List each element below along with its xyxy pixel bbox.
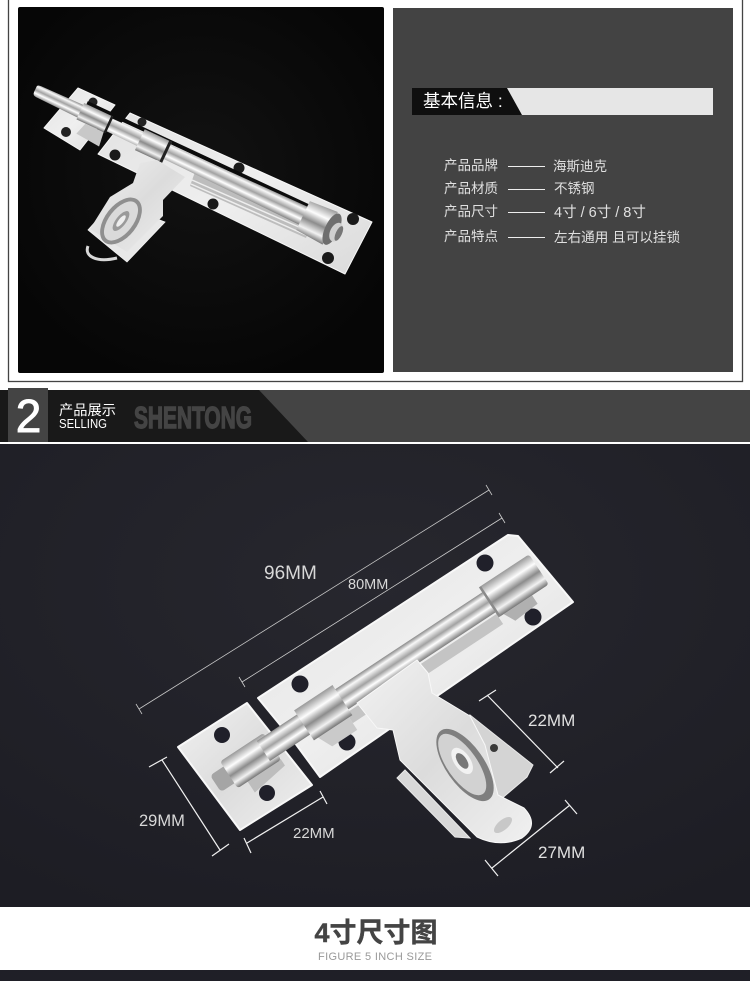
section header: product showcase (0, 388, 750, 442)
section title: 产品展示 (59, 402, 116, 419)
dimension: hasp 27MM (485, 800, 585, 876)
spec row: features: 左右通用 且可以挂锁 (554, 230, 681, 245)
spec row: material: 产品材质 (444, 181, 498, 196)
bolt track (190, 172, 312, 238)
caption title: 4寸尺寸图 (314, 918, 438, 948)
dimension: bolt length 80MM: 80MM (348, 577, 388, 593)
heading: basic information: 基本信息 : (423, 91, 503, 111)
dimension: plate width 22MM (244, 791, 335, 853)
spec row: features (444, 229, 681, 245)
section number (8, 388, 48, 442)
caption subtitle: FIGURE 5 INCH SIZE (318, 951, 432, 963)
spec row: size: 产品尺寸 (444, 204, 498, 219)
icon: dimensioned barrel bolt (178, 535, 573, 843)
dimension: plate height 29MM: 29MM (139, 812, 185, 830)
gap shadow (87, 103, 310, 207)
spec row: brand: 产品品牌 (444, 157, 498, 173)
caption (0, 907, 750, 970)
spec row: material (444, 181, 594, 196)
dimension: plate width 22MM: 22MM (293, 825, 335, 842)
dimension: plate height 29MM (139, 757, 229, 856)
heading: basic information (412, 88, 713, 115)
dimension: hasp 22MM: 22MM (528, 711, 575, 730)
dimension: overall length 96MM (136, 485, 492, 714)
section number: 2 (16, 390, 41, 442)
section title (59, 402, 116, 431)
dimension: hasp 27MM: 27MM (538, 843, 585, 862)
spec row: material: 不锈钢 (554, 181, 594, 196)
spec row: size: 4寸 / 6寸 / 8寸 (554, 204, 646, 221)
brand watermark: SHENTONG (134, 400, 252, 435)
section title: SELLING (59, 416, 107, 431)
panel: dimension photo (0, 444, 750, 907)
panel: product photo (18, 7, 384, 373)
spec row: brand (444, 157, 607, 174)
bottom dark strip (0, 970, 750, 981)
dimension: hasp 22MM (479, 690, 575, 773)
dimension: overall length 96MM: 96MM (264, 563, 317, 584)
spec row: features: 产品特点 (444, 229, 498, 244)
icon: top view barrel bolt (25, 74, 372, 274)
icon: hasp (357, 660, 533, 843)
spec row: size (444, 204, 646, 221)
icon: hasp (87, 160, 185, 262)
dimension: bolt length 80MM (239, 513, 505, 687)
spec row: brand: 海斯迪克 (553, 159, 607, 174)
panel: basic information (393, 8, 733, 372)
